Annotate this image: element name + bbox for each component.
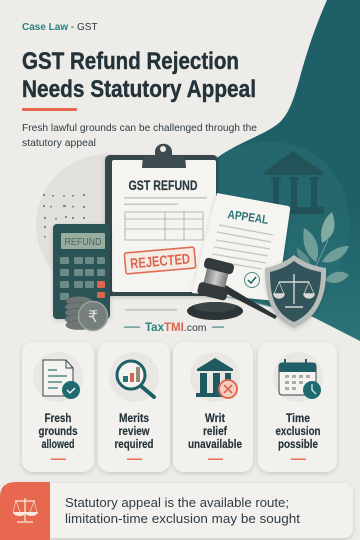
form table	[125, 212, 203, 240]
label	[276, 413, 320, 451]
label: Time	[286, 413, 310, 425]
decorative dots	[43, 194, 85, 238]
subtitle: Fresh lawful grounds can be challenged through the	[22, 122, 257, 134]
clipboard paper	[112, 160, 216, 292]
card: merits review	[98, 342, 170, 472]
subtitle: statutory appeal	[22, 137, 96, 149]
calculator	[53, 224, 110, 319]
icon: courthouse silhouette	[264, 151, 324, 214]
coin stack	[65, 296, 108, 330]
grey circle behind calculator	[36, 154, 178, 296]
desk line	[125, 309, 177, 311]
label	[114, 413, 154, 451]
check badge	[244, 272, 260, 288]
takeaway text: limitation-time exclusion may be sought	[65, 511, 300, 526]
takeaway text: Statutory appeal is the available route;	[65, 495, 289, 510]
calculator keys	[60, 257, 105, 300]
card: writ relief	[173, 342, 253, 472]
label: review	[118, 426, 150, 438]
icon: document check	[43, 360, 80, 399]
label: relief	[203, 426, 227, 438]
label: Fresh	[44, 413, 72, 425]
form lines	[124, 197, 207, 199]
title	[22, 48, 256, 103]
lighter teal arc	[217, 142, 349, 317]
title underline	[22, 108, 77, 111]
gavel	[187, 257, 277, 320]
form heading: GST REFUND	[128, 178, 198, 193]
kicker: Case Law - GST	[22, 22, 98, 33]
icon: magnifier chart	[117, 361, 154, 397]
label: required	[114, 439, 154, 451]
card: time exclusion	[258, 342, 337, 472]
clipboard	[105, 144, 218, 296]
label	[38, 413, 78, 451]
calculator: REFUND	[64, 237, 102, 248]
appeal lines	[212, 225, 273, 269]
title: Needs Statutory Appeal	[22, 76, 256, 103]
calculator screen	[61, 233, 105, 249]
icon: bank with cross	[196, 358, 237, 398]
label: unavailable	[188, 439, 242, 451]
icon: calendar clock	[279, 359, 321, 399]
appeal document	[192, 193, 290, 301]
teal background shape	[205, 0, 360, 341]
subtitle	[22, 122, 257, 149]
title: GST Refund Rejection	[22, 48, 239, 75]
takeaway bar	[0, 482, 353, 540]
brand logo	[124, 322, 224, 334]
clipboard clip	[142, 144, 186, 168]
label: allowed	[42, 439, 74, 451]
appeal heading: APPEAL	[227, 207, 269, 227]
shield with scales	[265, 255, 326, 328]
label: Merits	[119, 413, 149, 425]
rejected stamp	[124, 247, 196, 274]
label	[188, 413, 242, 451]
label: Writ	[205, 413, 225, 425]
icon: leaves	[297, 212, 349, 290]
card: fresh grounds	[22, 342, 94, 472]
coral icon block	[0, 482, 50, 540]
scales glyph	[274, 274, 314, 307]
brand logo: TaxTMI.com	[145, 322, 207, 334]
coin stack: ₹	[88, 307, 98, 326]
label: grounds	[38, 426, 78, 438]
label: possible	[278, 439, 318, 451]
rejected stamp: REJECTED	[130, 251, 191, 273]
rupee coin	[78, 302, 108, 330]
label: exclusion	[276, 426, 320, 438]
takeaway text	[65, 495, 300, 526]
icon: scales	[13, 498, 38, 522]
